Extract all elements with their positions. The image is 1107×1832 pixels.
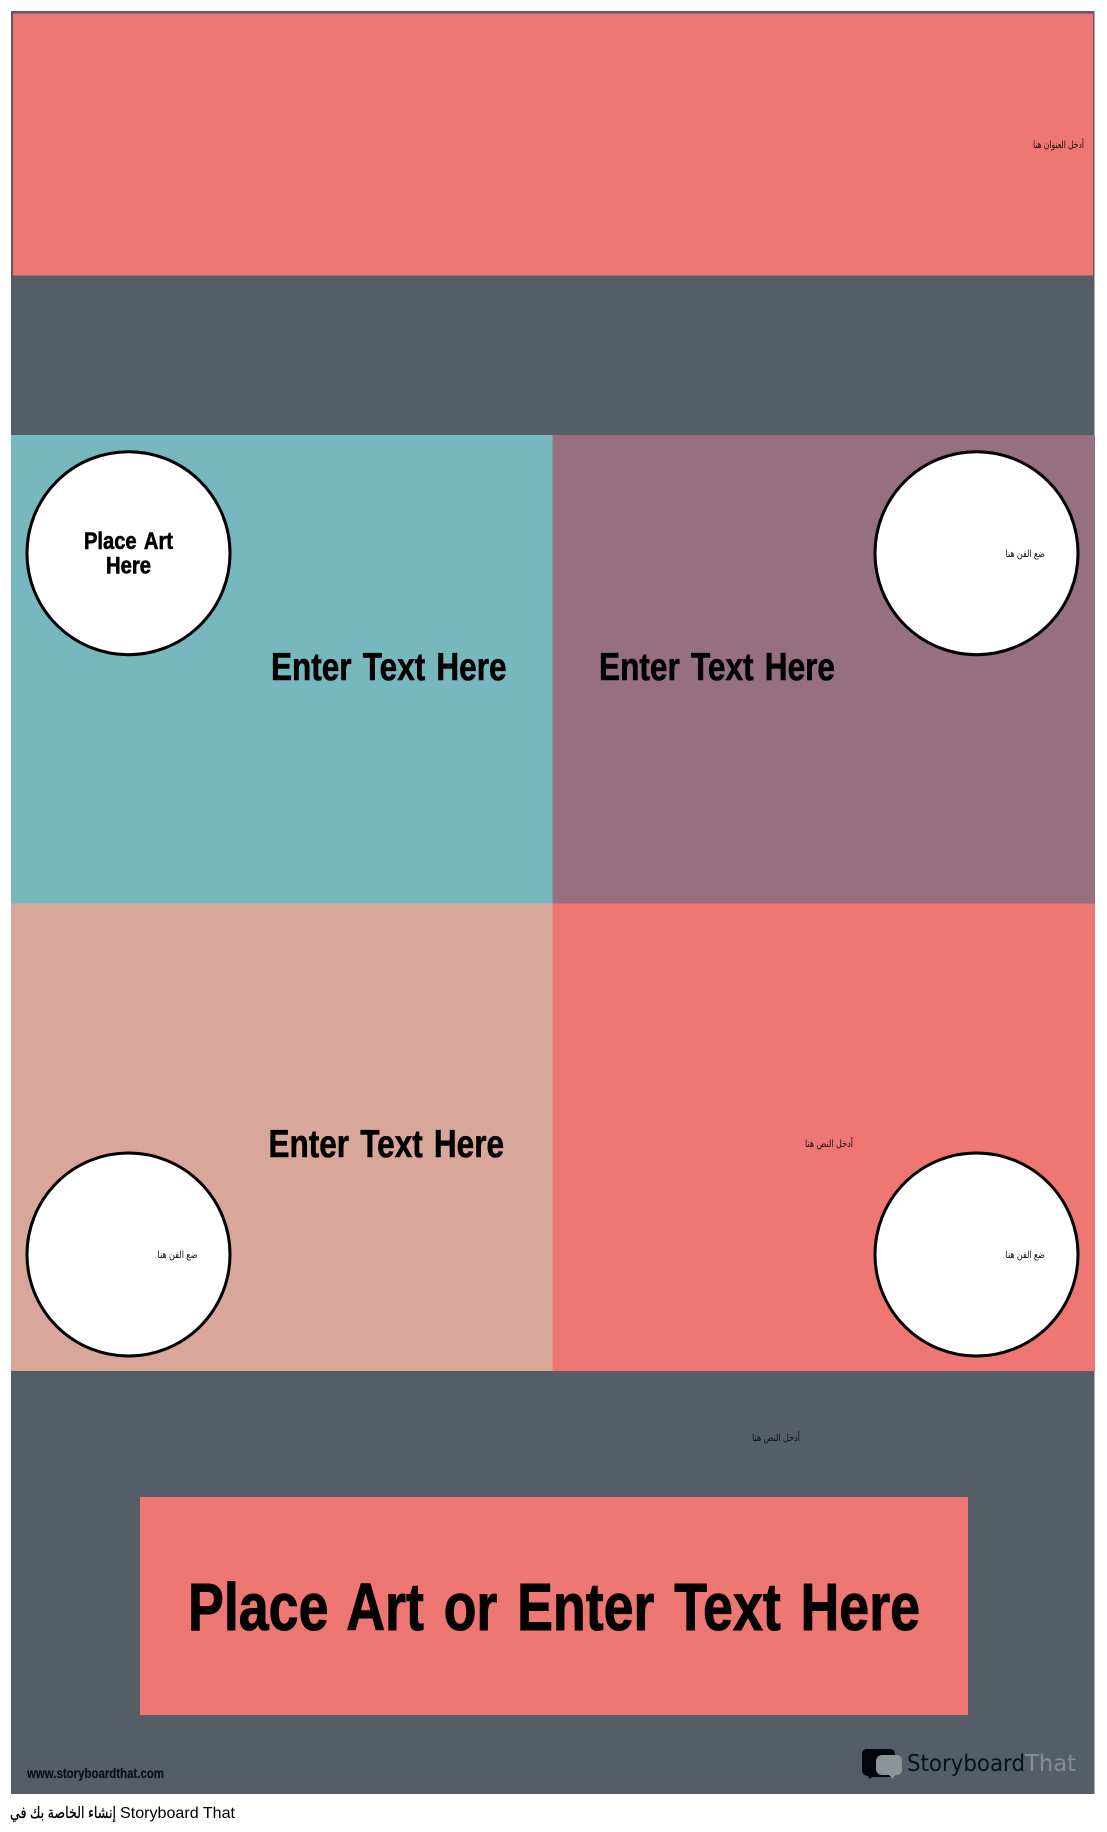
- circle label: Here: [106, 552, 151, 580]
- footer band placeholder text: أدخل النص هنا: [752, 1431, 800, 1444]
- attribution line: Storyboard That: [120, 1805, 236, 1822]
- logo: Storyboard That: [862, 1749, 1076, 1779]
- section heading: Enter Text Here: [271, 646, 506, 689]
- section heading: Enter Text Here: [268, 1123, 504, 1166]
- website address: www.storyboardthat.com: [26, 1765, 164, 1781]
- icon: black speech bubble: [862, 1749, 895, 1779]
- logo wordmark: That: [1024, 1751, 1076, 1777]
- icon: art circle: [875, 1153, 1078, 1356]
- panel: coral section: [552, 904, 1095, 1371]
- circle label: Place Art: [84, 528, 173, 555]
- circle placeholder text: ضع الفن هنا: [158, 1250, 198, 1261]
- section placeholder text: أدخل النص هنا: [805, 1137, 853, 1150]
- icon: art circle: [27, 1153, 230, 1356]
- circle placeholder text: ضع الفن هنا: [1006, 1250, 1045, 1261]
- panel: purple section: [552, 435, 1095, 904]
- attribution line: إنشاء الخاصة بك في: [10, 1805, 116, 1823]
- call-to-action text: Place Art or Enter Text Here: [188, 1570, 920, 1645]
- section heading: Enter Text Here: [599, 646, 835, 689]
- logo wordmark: Storyboard: [907, 1751, 1025, 1777]
- title placeholder text: أدخل العنوان هنا: [1033, 138, 1084, 151]
- icon: art circle: [27, 452, 230, 655]
- panel: title banner: [13, 14, 1093, 276]
- icon: art circle: [875, 452, 1078, 655]
- panel: teal section: [11, 435, 552, 904]
- icon: gray speech bubble: [876, 1755, 902, 1779]
- circle placeholder text: ضع الفن هنا: [1006, 549, 1045, 560]
- panel: peach section: [11, 904, 552, 1371]
- panel: call-to-action box: [140, 1497, 968, 1715]
